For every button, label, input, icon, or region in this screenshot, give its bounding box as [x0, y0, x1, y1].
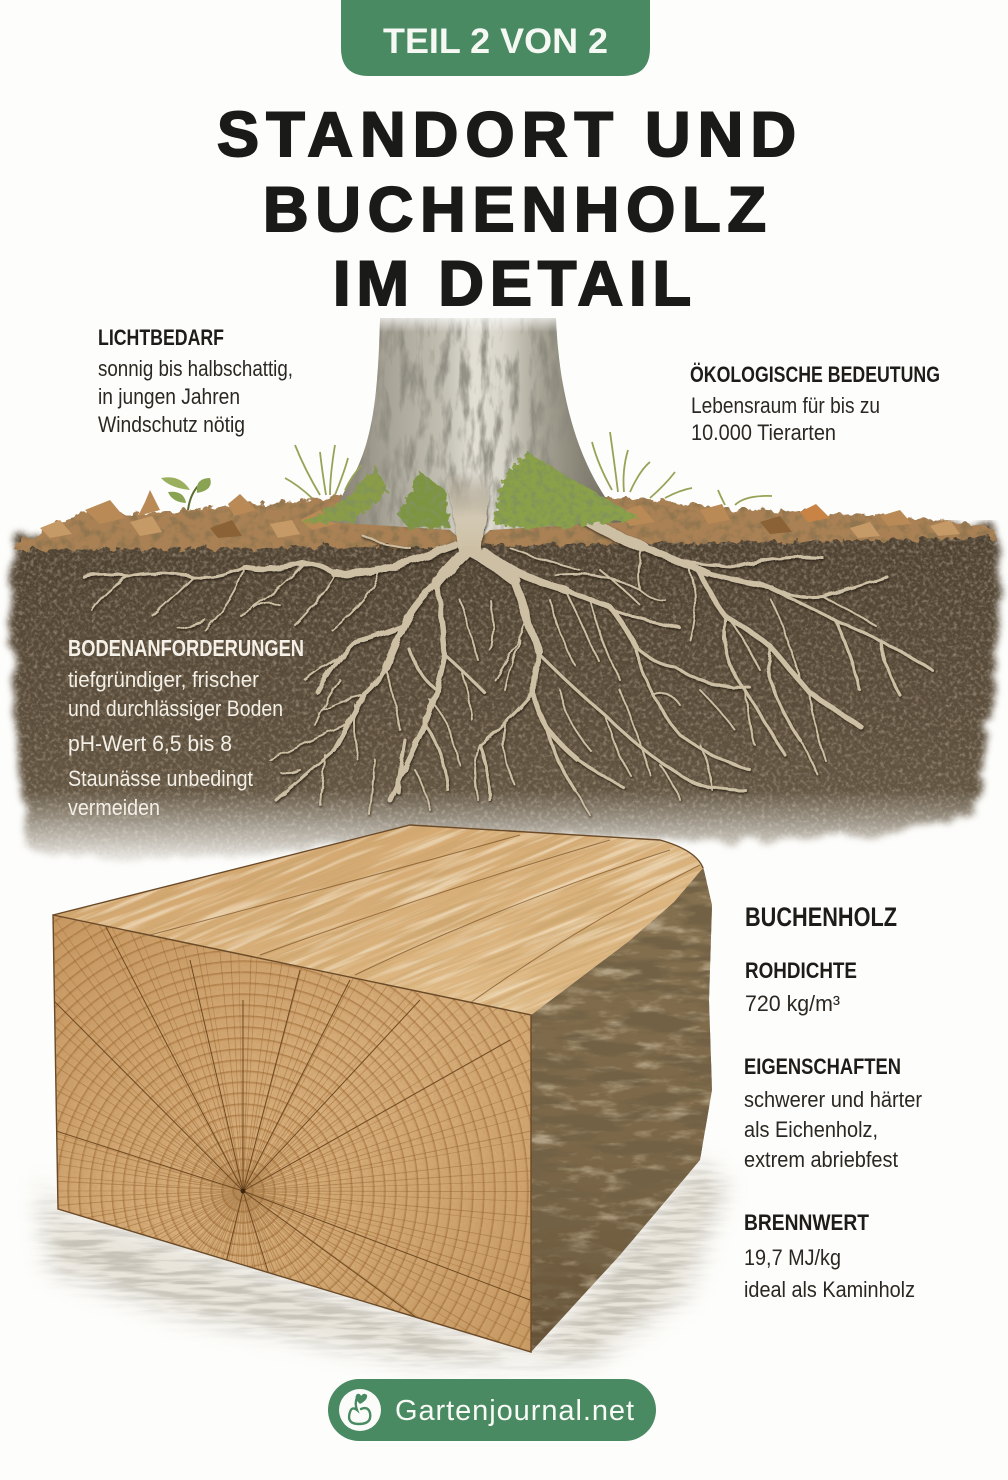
fact: Eigenschaften: extrem abriebfest	[744, 1147, 898, 1172]
leaf litter band	[14, 498, 996, 550]
wood block illustration	[0, 574, 815, 1416]
left main root	[334, 545, 455, 574]
tap root	[444, 470, 492, 556]
trunk top fade	[360, 312, 575, 332]
top face	[52, 824, 704, 1014]
text block: Bodenanforderungen: tiefgründiger, frischer	[68, 667, 259, 692]
moss at trunk base	[300, 452, 640, 530]
title: STANDORT UND	[217, 100, 796, 170]
footer label: Gartenjournal.net	[395, 1395, 634, 1427]
fallen leaves	[40, 490, 960, 538]
text block: Lichtbedarf	[98, 325, 293, 437]
text block: Ökologische Bedeutung	[690, 362, 940, 445]
growth rings	[54, 917, 530, 1351]
text block: Ökologische Bedeutung: 10.000 Tierarten	[691, 420, 836, 445]
fact: Eigenschaften: schwerer und härter	[744, 1087, 922, 1112]
fact: Brennwert: ideal als Kaminholz	[744, 1277, 915, 1302]
text block: Lichtbedarf: in jungen Jahren	[98, 384, 240, 409]
center root	[473, 552, 514, 580]
text block: Bodenanforderungen: und durchlässiger Boden	[68, 696, 283, 721]
text block: Bodenanforderungen: BODENANFORDERUNGEN	[68, 635, 304, 661]
text block: Bodenanforderungen: pH-Wert 6,5 bis 8	[68, 731, 232, 756]
fact: Rohdichte	[745, 958, 857, 1016]
center-left root	[437, 552, 465, 583]
text block: Buchenholz	[744, 902, 922, 1302]
right-center root	[485, 552, 566, 590]
fact: Brennwert	[744, 1210, 915, 1302]
text block: Bodenanforderungen: vermeiden	[68, 795, 160, 820]
heading: Buchenholz: BUCHENHOLZ	[745, 902, 897, 932]
top badge	[341, 0, 650, 76]
title: IM DETAIL	[333, 249, 691, 319]
fact: Rohdichte: ROHDICHTE	[745, 958, 857, 983]
tree trunk	[330, 318, 625, 536]
text block: Bodenanforderungen: Staunässe unbedingt	[68, 766, 253, 791]
fact: Eigenschaften	[744, 1054, 922, 1172]
title: BUCHENHOLZ	[263, 175, 766, 245]
fact: Eigenschaften: als Eichenholz,	[744, 1117, 878, 1142]
title	[217, 100, 796, 319]
fact: Brennwert: 19,7 MJ/kg	[744, 1245, 841, 1270]
icon: garden logo	[339, 1389, 381, 1431]
text block: Lichtbedarf: Windschutz nötig	[98, 412, 245, 437]
front end-grain face	[52, 914, 532, 1353]
radial cracks	[53, 925, 530, 1320]
footer badge	[328, 1379, 656, 1441]
right main root	[570, 510, 643, 547]
text block: Bodenanforderungen	[68, 635, 304, 820]
bark texture	[342, 318, 612, 536]
badge label: TEIL 2 VON 2	[383, 22, 608, 61]
grass tufts	[285, 432, 772, 505]
text block: Ökologische Bedeutung: Lebensraum für bis zu	[691, 393, 880, 418]
soil body	[0, 520, 1008, 870]
panel: soil cross-section	[0, 477, 1008, 870]
seedling	[161, 477, 211, 510]
text block: Ökologische Bedeutung: ÖKOLOGISCHE BEDEUTUNG	[690, 362, 940, 387]
fact: Brennwert: BRENNWERT	[744, 1210, 869, 1235]
text block: Lichtbedarf: sonnig bis halbschattig,	[98, 356, 293, 381]
text block: Lichtbedarf: LICHTBEDARF	[98, 325, 224, 350]
side bark face	[532, 866, 712, 1352]
fact: Rohdichte: 720 kg/m³	[745, 991, 840, 1016]
roots	[84, 470, 932, 815]
fact: Eigenschaften: EIGENSCHAFTEN	[744, 1054, 901, 1079]
ground shadow under wood block	[30, 1156, 734, 1376]
